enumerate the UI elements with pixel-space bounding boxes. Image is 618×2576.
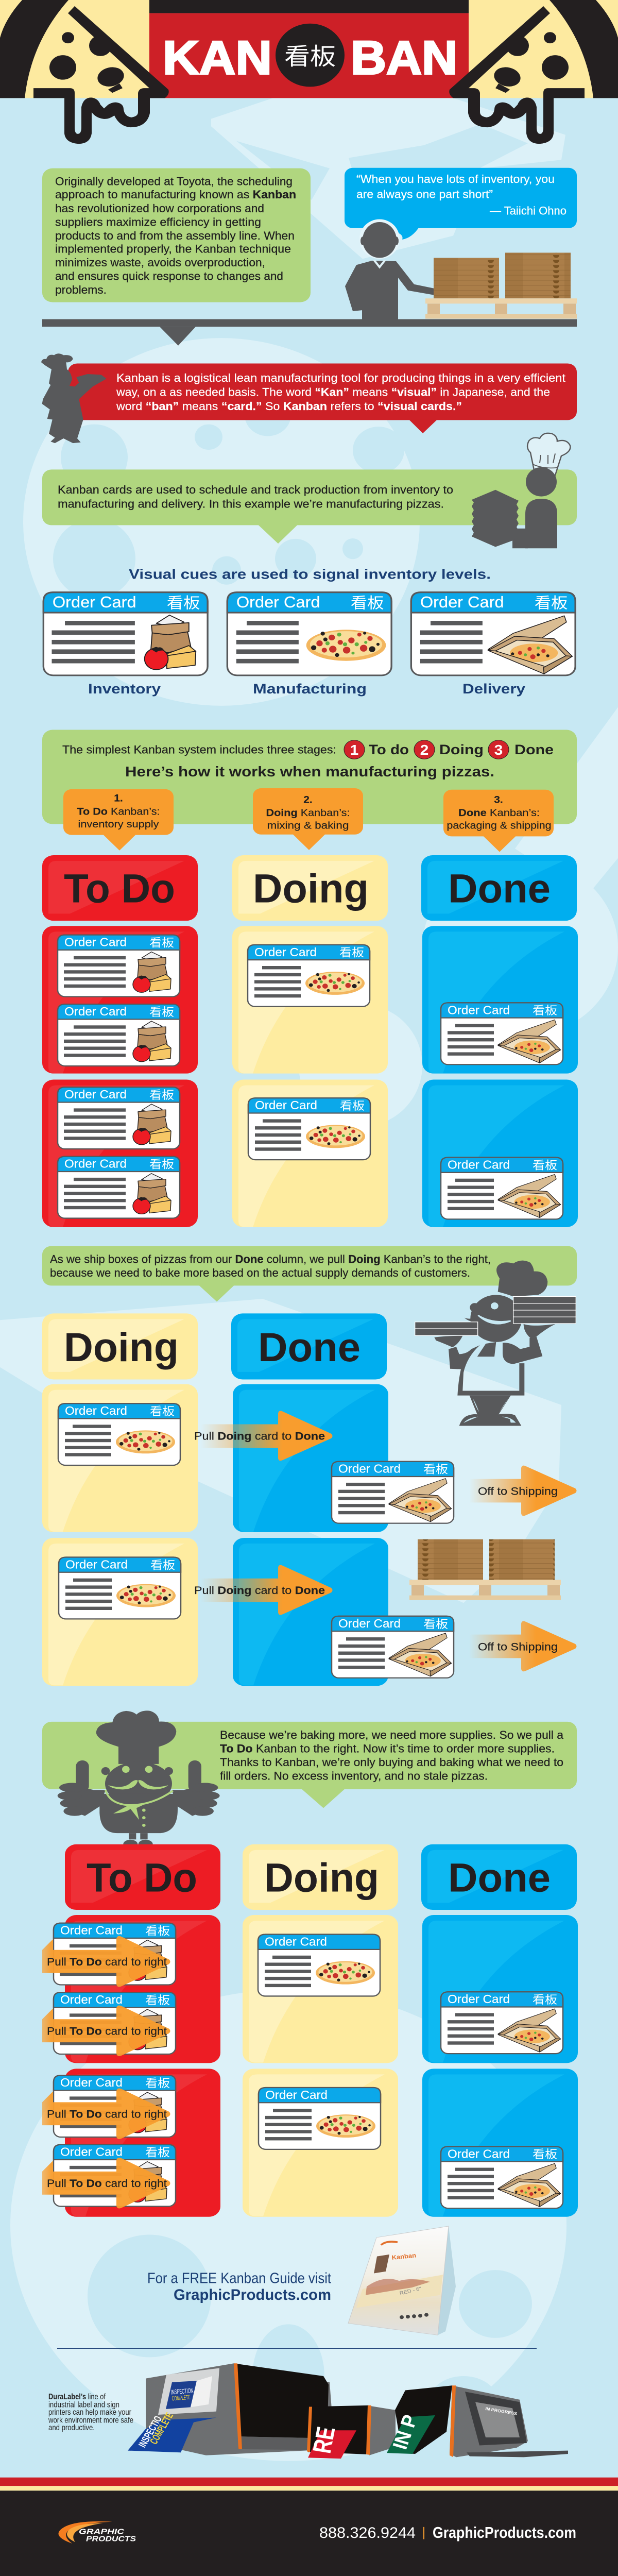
callout: shipping explanation: As we ship boxes of pizzas from our Done column, we pull Doing Kanban’s to the right, bbox=[50, 1252, 491, 1265]
icon: chef with stack of pizza boxes bbox=[472, 433, 570, 548]
arrow: pull doing card to done 2: Pull Doing card to Done bbox=[194, 1584, 325, 1597]
card: to do s3 2: 看板 bbox=[145, 1994, 170, 2007]
panel: Done row 2 bbox=[422, 1080, 578, 1227]
illustration: kanban guide booklet: RED - 6" bbox=[399, 2286, 422, 2296]
callout: stage 3: 3. bbox=[494, 794, 503, 805]
card: to do s3 4 bbox=[54, 2145, 176, 2207]
callout: supplies explanation: Because we’re baking more, we need more supplies. So we pull a bbox=[220, 1728, 563, 1741]
heading: visual cues: Visual cues are used to signal inventory levels. bbox=[129, 567, 491, 582]
card: done 2: 看板 bbox=[533, 1159, 557, 1172]
panel: introduction bbox=[42, 168, 311, 302]
card: delivery bbox=[411, 592, 575, 675]
illustration: manager with pizza boxes on pallet bbox=[42, 219, 577, 346]
icon: left pizza slice bbox=[0, 0, 169, 144]
column header: Done (section 3): Done bbox=[448, 1855, 551, 1900]
card: done s2 1 bbox=[332, 1462, 454, 1523]
text: DuraLabel: industrial label and sign bbox=[48, 2400, 119, 2409]
text: DuraLabel: and productive. bbox=[48, 2424, 95, 2432]
logo: Graphic Products: GRAPHIC bbox=[79, 2528, 125, 2536]
arrow: off to shipping 2: Off to Shipping bbox=[478, 1641, 558, 1653]
card: doing s2 1: Order Card bbox=[65, 1404, 127, 1418]
arrow: pull to do card to right 4 bbox=[42, 2158, 170, 2209]
text: DuraLabel: DuraLabel’s line of bbox=[48, 2392, 106, 2401]
card: doing 1 bbox=[248, 945, 370, 1007]
panel: Done section 2 row 1 bbox=[233, 1384, 388, 1532]
card: manufacturing: 看板 bbox=[351, 595, 384, 612]
card: done 1: 看板 bbox=[533, 1004, 557, 1017]
card: doing s3 2 bbox=[259, 2088, 381, 2149]
card: done s2 2: 看板 bbox=[423, 1618, 448, 1631]
arrow: pull to do card to right 2: Pull To Do card to right bbox=[47, 2025, 167, 2037]
icon: waiter chef with pizza boxes bbox=[415, 1261, 576, 1426]
card: to do 4 bbox=[58, 1157, 180, 1218]
printer: small: RE bbox=[308, 2425, 341, 2455]
callout: stage 1: inventory supply bbox=[78, 819, 160, 830]
column header: To Do bbox=[42, 855, 198, 921]
arrow: pull to do card to right 4: Pull To Do card to right bbox=[47, 2177, 167, 2190]
callout: supplies explanation: Thanks to Kanban, we’re only buying and baking what we need to bbox=[220, 1756, 563, 1769]
card: done s3 1: Order Card bbox=[448, 1993, 510, 2006]
panel: Done section 2 row 2 bbox=[233, 1538, 388, 1686]
footer contact bbox=[319, 2523, 576, 2541]
text: DuraLabel: work environment more safe bbox=[48, 2416, 133, 2425]
card: to do 1 bbox=[58, 935, 180, 996]
panel: introduction: implemented properly, the Kanban technique bbox=[55, 242, 291, 255]
arrow: pull doing card to done 1 bbox=[194, 1411, 333, 1461]
logo: Graphic Products bbox=[58, 2521, 136, 2544]
callout: stage 2 bbox=[253, 788, 363, 850]
panel: introduction: problems. bbox=[55, 283, 107, 296]
printer: small bbox=[307, 2405, 396, 2459]
card: done s2 1: 看板 bbox=[423, 1463, 448, 1476]
card: to do s3 3 bbox=[54, 2075, 176, 2137]
text: DuraLabel: printers can help make your bbox=[48, 2408, 131, 2417]
column header: To Do: To Do bbox=[64, 866, 175, 911]
card: manufacturing bbox=[227, 592, 391, 675]
card: to do s3 4: Order Card bbox=[60, 2146, 123, 2159]
card: to do 2: 看板 bbox=[149, 1006, 174, 1019]
footer stripes bbox=[0, 2478, 618, 2576]
callout: stage 3: Done Kanban’s: bbox=[458, 808, 540, 819]
title: BAN: BAN bbox=[351, 32, 457, 84]
panel: introduction: products to and from the assembly line. When bbox=[55, 229, 295, 242]
card: inventory: 看板 bbox=[167, 595, 200, 612]
panel: three stages: 1 bbox=[350, 742, 358, 758]
panel: introduction: has revolutionized how corporations and bbox=[55, 202, 264, 215]
callout: shipping explanation bbox=[42, 1246, 577, 1302]
card: done s3 1: 看板 bbox=[533, 1993, 557, 2006]
callout: stage 1: 1. bbox=[114, 793, 123, 804]
icon: chef giving thumbs up bbox=[58, 1710, 220, 1849]
arrow: pull to do card to right 3: Pull To Do card to right bbox=[47, 2108, 167, 2120]
printer: large: INSPECTION bbox=[170, 2387, 194, 2396]
printer: touchscreen with keyboard bbox=[387, 2385, 568, 2457]
printer: large bbox=[128, 2363, 335, 2455]
card: to do s3 3: 看板 bbox=[145, 2077, 170, 2090]
panel: To Do row 2 bbox=[42, 1080, 198, 1227]
arrow: pull doing card to done 2 bbox=[194, 1565, 333, 1615]
card: to do s3 1: Order Card bbox=[60, 1924, 123, 1937]
card: to do s3 1: 看板 bbox=[145, 1924, 170, 1937]
panel: Doing section 2 row 2 bbox=[42, 1538, 198, 1686]
callout: supplies explanation bbox=[42, 1722, 577, 1808]
column header: To Do (section 3): To Do bbox=[87, 1855, 197, 1900]
column header: Done (section 2): Done bbox=[258, 1325, 360, 1370]
card: doing s2 2 bbox=[59, 1557, 181, 1619]
card: to do 3: Order Card bbox=[64, 1088, 127, 1101]
callout: stage 2: mixing & baking bbox=[267, 820, 349, 831]
panel: three stages: Here’s how it works when manufacturing pizzas. bbox=[125, 764, 494, 780]
callout: stage 1 bbox=[63, 789, 174, 851]
card: to do s3 3: Order Card bbox=[60, 2076, 123, 2090]
title badge: kanji: 看板 bbox=[284, 44, 336, 70]
header banner bbox=[0, 0, 618, 144]
column header: Doing: Doing bbox=[253, 866, 369, 911]
footer contact: 888.326.9244 bbox=[319, 2524, 416, 2541]
printer: large: INSPECTIO bbox=[136, 2414, 164, 2449]
column header: Doing (section 2): Doing bbox=[64, 1325, 179, 1370]
callout: supplies explanation: fill orders. No excess inventory, and no stale pizzas. bbox=[220, 1769, 488, 1782]
arrow: pull to do card to right 1: Pull To Do card to right bbox=[47, 1956, 167, 1968]
icon: right pizza slice bbox=[449, 0, 618, 144]
card: done s2 2: Order Card bbox=[338, 1617, 401, 1631]
illustration: DuraLabel printers bbox=[128, 2363, 568, 2459]
callout: stage 1: To Do Kanban’s: bbox=[77, 806, 160, 817]
card: done 2 bbox=[441, 1158, 563, 1219]
card: doing 2: Order Card bbox=[255, 1099, 317, 1112]
callout: shipping explanation: because we need to bake more based on the actual supply demands of customers. bbox=[50, 1266, 470, 1279]
text: free kanban guide: For a FREE Kanban Guide visit bbox=[147, 2270, 332, 2286]
card: to do 3 bbox=[58, 1087, 180, 1149]
card: to do 4: Order Card bbox=[64, 1158, 127, 1171]
column header: Done (section 2) bbox=[231, 1313, 387, 1380]
arrow: off to shipping 1: Off to Shipping bbox=[478, 1485, 558, 1497]
panel: To Do row 1 bbox=[42, 926, 198, 1074]
callout: Taiichi Ohno quote: — Taiichi Ohno bbox=[490, 204, 566, 217]
callout: stage 2: Doing Kanban’s: bbox=[266, 808, 350, 819]
icon: chef carrying pizza bbox=[41, 353, 107, 443]
card: doing s2 2: Order Card bbox=[65, 1558, 128, 1571]
card: to do 2 bbox=[58, 1004, 180, 1066]
panel: introduction: Originally developed at Toyota, the scheduling bbox=[55, 175, 293, 188]
card: done s2 1: Order Card bbox=[338, 1463, 401, 1476]
card: to do 2: Order Card bbox=[64, 1005, 127, 1019]
card: to do 1: 看板 bbox=[149, 936, 174, 949]
card: delivery: 看板 bbox=[535, 595, 568, 612]
card: done s3 2: 看板 bbox=[533, 2148, 557, 2161]
card: to do 4: 看板 bbox=[149, 1158, 174, 1171]
panel: introduction: and ensures quick response to changes and bbox=[55, 270, 283, 282]
arrow: pull to do card to right 3 bbox=[42, 2089, 170, 2139]
illustration: kanban guide booklet bbox=[348, 2226, 456, 2335]
card: done 1: Order Card bbox=[448, 1004, 510, 1017]
callout: Taiichi Ohno quote: are always one part short” bbox=[356, 188, 493, 200]
callout: supplies explanation: To Do Kanban to the right. Now it’s time to order more supplies. bbox=[220, 1742, 555, 1755]
panel: Doing row 2 bbox=[232, 1080, 388, 1227]
printer: large: COMPLETE bbox=[148, 2411, 176, 2446]
panel: Doing section 2 row 1 bbox=[42, 1384, 198, 1532]
card: to do 3: 看板 bbox=[149, 1089, 174, 1101]
callout: kanban definition: way, on a as needed basis. The word “Kan” means “visual” in Japanese, and the bbox=[116, 386, 550, 398]
arrow: pull to do card to right 2 bbox=[42, 2005, 170, 2056]
card: manufacturing: Order Card bbox=[236, 594, 320, 611]
card: doing s3 1 bbox=[258, 1935, 380, 1996]
panel: three stages: Done bbox=[514, 742, 554, 757]
callout: kanban cards explanation bbox=[42, 469, 577, 544]
column header: Doing bbox=[232, 855, 388, 921]
callout: kanban definition: word “ban” means “card.” So Kanban refers to “visual cards.” bbox=[116, 400, 462, 413]
arrow: pull to do card to right 1 bbox=[42, 1936, 170, 1987]
callout: stage 2: 2. bbox=[303, 794, 313, 805]
card: doing 2: 看板 bbox=[340, 1099, 365, 1112]
card: to do 1: Order Card bbox=[64, 936, 127, 949]
divider line bbox=[57, 2348, 537, 2349]
card: inventory bbox=[43, 592, 208, 675]
column header: Doing (section 3): Doing bbox=[264, 1855, 379, 1900]
column header: Doing (section 2) bbox=[42, 1313, 198, 1380]
card: to do s3 2: Order Card bbox=[60, 1993, 123, 2007]
text: free kanban guide: GraphicProducts.com bbox=[174, 2286, 331, 2303]
printer: touchscreen with keyboard: IN P bbox=[388, 2412, 422, 2452]
card: done 2: Order Card bbox=[448, 1158, 510, 1172]
column header: Done (section 3) bbox=[421, 1844, 577, 1910]
panel: introduction: approach to manufacturing known as Kanban bbox=[55, 188, 296, 201]
card: doing 2 bbox=[248, 1098, 370, 1160]
arrow: off to shipping 1 bbox=[469, 1466, 577, 1516]
card: doing 1: Order Card bbox=[254, 946, 317, 959]
callout: kanban definition: Kanban is a logistical lean manufacturing tool for producing things in a very efficient bbox=[116, 371, 566, 384]
card: inventory: Order Card bbox=[53, 594, 136, 611]
text: free kanban guide bbox=[147, 2270, 332, 2303]
column header: Done bbox=[421, 855, 577, 921]
column header: To Do (section 3) bbox=[65, 1844, 220, 1910]
panel: Doing section 3 row 2 bbox=[243, 2069, 398, 2217]
card: to do s3 1 bbox=[54, 1923, 176, 1985]
panel: Done section 3 row 1 bbox=[422, 1915, 578, 2063]
card: to do s3 2 bbox=[54, 1992, 176, 2054]
logo: Graphic Products: PRODUCTS bbox=[86, 2535, 136, 2543]
text: DuraLabel bbox=[48, 2392, 133, 2432]
panel: three stages: Doing bbox=[439, 742, 484, 757]
card: done s3 1 bbox=[441, 1992, 563, 2054]
illustration: kanban guide booklet: Kanban bbox=[391, 2252, 417, 2261]
panel: To Do section 3 row 1 bbox=[65, 1915, 220, 2063]
label: inventory: Inventory bbox=[88, 681, 161, 697]
card: to do s3 4: 看板 bbox=[145, 2146, 170, 2159]
card: doing s3 2: Order Card bbox=[265, 2089, 328, 2102]
card: done s3 2: Order Card bbox=[448, 2147, 510, 2161]
card: doing s3 1: Order Card bbox=[265, 1935, 327, 1948]
column header: Done: Done bbox=[448, 866, 551, 911]
footer contact: GraphicProducts.com bbox=[433, 2523, 576, 2541]
panel: Done section 3 row 2 bbox=[422, 2069, 578, 2217]
card: doing 1: 看板 bbox=[339, 946, 364, 959]
panel: three stages: 3 bbox=[494, 742, 503, 758]
printer: touchscreen with keyboard: IN PROGRESS bbox=[485, 2406, 518, 2416]
callout: kanban cards explanation: Kanban cards are used to schedule and track production from inventory to bbox=[58, 483, 453, 496]
callout: kanban cards explanation: manufacturing and delivery. In this example we’re manufacturing pizzas. bbox=[58, 497, 444, 510]
callout: stage 3 bbox=[443, 790, 554, 852]
panel: Done row 1 bbox=[422, 926, 578, 1074]
column header: Doing (section 3) bbox=[243, 1844, 398, 1910]
panel: introduction: suppliers maximize efficiency in getting bbox=[55, 215, 261, 228]
card: delivery: Order Card bbox=[420, 594, 504, 611]
panel: Doing section 3 row 1 bbox=[243, 1915, 398, 2063]
printer: large: COMPLETE bbox=[171, 2394, 191, 2402]
panel: introduction: minimizes waste, avoids overproduction, bbox=[55, 256, 265, 269]
label: manufacturing: Manufacturing bbox=[253, 681, 367, 697]
card: doing s2 1: 看板 bbox=[150, 1405, 175, 1418]
card: done 1 bbox=[441, 1003, 563, 1064]
panel: three stages bbox=[42, 730, 577, 824]
card: done s2 2 bbox=[332, 1616, 454, 1678]
illustration: pallet of pizza boxes bbox=[409, 1539, 561, 1600]
card: done s3 2 bbox=[441, 2146, 563, 2208]
callout: Taiichi Ohno quote bbox=[345, 168, 577, 240]
panel: three stages: The simplest Kanban system includes three stages: bbox=[62, 743, 336, 756]
arrow: pull doing card to done 1: Pull Doing card to Done bbox=[194, 1430, 325, 1442]
panel: three stages: 2 bbox=[420, 742, 428, 758]
title badge: kanji bbox=[276, 24, 345, 87]
callout: stage 3: packaging & shipping bbox=[447, 820, 551, 831]
panel: Doing row 1 bbox=[232, 926, 388, 1074]
title: KAN: KAN bbox=[163, 32, 272, 84]
panel: three stages: To do bbox=[369, 742, 409, 757]
label: delivery: Delivery bbox=[462, 681, 526, 697]
callout: kanban definition bbox=[68, 364, 577, 433]
callout: Taiichi Ohno quote: “When you have lots of inventory, you bbox=[356, 173, 555, 185]
arrow: off to shipping 2 bbox=[469, 1621, 577, 1671]
card: doing s2 1 bbox=[58, 1403, 180, 1465]
panel: To Do section 3 row 2 bbox=[65, 2069, 220, 2217]
card: doing s2 2: 看板 bbox=[150, 1558, 175, 1571]
